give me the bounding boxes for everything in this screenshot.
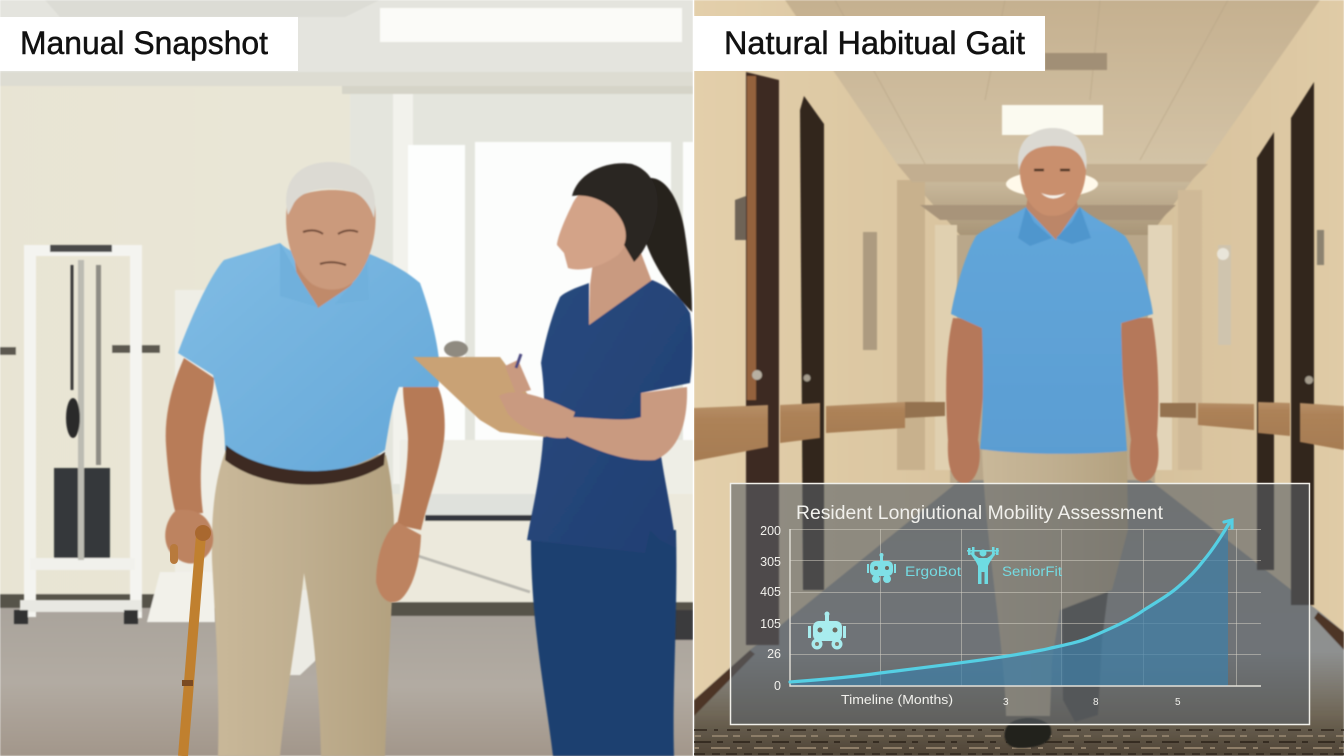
x axis labels: 8 bbox=[1093, 697, 1099, 708]
walking man's trousers bbox=[982, 450, 1128, 716]
walking man's shoe bbox=[1005, 718, 1051, 748]
y axis labels: 26 bbox=[767, 647, 781, 661]
walking man's eyes bbox=[1034, 169, 1070, 171]
ceiling lights bbox=[1002, 53, 1107, 197]
heading: Natural Habitual Gait bbox=[694, 16, 1045, 71]
clipboard clip bbox=[444, 341, 468, 357]
x axis labels bbox=[841, 693, 1181, 708]
chart title: Resident Longiutional Mobility Assessment bbox=[796, 503, 1164, 524]
walking man's arms bbox=[946, 318, 1159, 484]
label: SeniorFit: SeniorFit bbox=[1002, 564, 1062, 579]
nurse's head bbox=[556, 194, 627, 270]
nurse's hair bbox=[572, 163, 658, 262]
man's arms bbox=[165, 358, 445, 602]
chart grid lines bbox=[790, 529, 1261, 686]
walking man's smile bbox=[1041, 193, 1066, 198]
panel: natural habitual gait scene bbox=[694, 0, 1344, 756]
pen bbox=[516, 354, 521, 368]
man's head bbox=[286, 190, 376, 290]
x axis labels: 5 bbox=[1175, 697, 1181, 708]
y axis labels: 200 bbox=[760, 524, 781, 538]
nurse's arm bbox=[565, 387, 687, 460]
man's collar bbox=[280, 246, 354, 308]
man's trousers bbox=[212, 450, 394, 756]
x axis labels: Timeline (Months) bbox=[841, 693, 953, 707]
walking man's head bbox=[1020, 144, 1086, 216]
y axis labels: 305 bbox=[760, 555, 781, 569]
man's belt bbox=[225, 445, 385, 485]
growth curve with arrow bbox=[790, 520, 1232, 682]
man's hair bbox=[286, 162, 375, 218]
y axis labels: 105 bbox=[760, 617, 781, 631]
person: smiling man walking bbox=[946, 128, 1159, 748]
panel: mobility assessment chart bbox=[730, 484, 1310, 724]
walking man's neck bbox=[1026, 196, 1078, 240]
y axis labels: 0 bbox=[774, 679, 781, 693]
man's neck bbox=[294, 262, 353, 308]
carpet texture bbox=[694, 730, 1344, 754]
icon: weightlifter SeniorFit bbox=[967, 547, 999, 584]
panel: manual snapshot scene bbox=[0, 0, 693, 756]
person: elderly man with cane bbox=[165, 162, 445, 756]
walking man's hair bbox=[1018, 128, 1087, 170]
man's shirt bbox=[178, 243, 440, 473]
doors bbox=[735, 72, 1324, 645]
icon: large robot bbox=[808, 612, 846, 650]
nurse's trousers bbox=[531, 530, 676, 756]
clinic room background bbox=[0, 0, 693, 756]
walking man's collar bbox=[1018, 207, 1091, 246]
y axis labels bbox=[760, 524, 781, 693]
dark shadowed leg and shoe bbox=[1062, 592, 1108, 721]
nurse's scrub top bbox=[527, 280, 692, 553]
icon: small robot ErgoBot bbox=[867, 553, 896, 583]
man's face details bbox=[303, 230, 358, 265]
heading: Manual Snapshot bbox=[0, 17, 298, 71]
walking man's shirt bbox=[951, 207, 1153, 454]
chart axes bbox=[790, 529, 1261, 686]
nurse's ponytail bbox=[642, 178, 692, 312]
heading: Manual Snapshot: Manual Snapshot bbox=[20, 25, 268, 61]
x axis labels: 3 bbox=[1003, 697, 1009, 708]
handrails bbox=[694, 402, 1344, 461]
icon: walking cane bbox=[174, 525, 211, 756]
hallway background bbox=[694, 0, 1344, 756]
heading: Natural Habitual Gait: Natural Habitual Gait bbox=[724, 25, 1025, 61]
exercise machine bbox=[14, 245, 142, 624]
nurse's neck bbox=[589, 240, 652, 325]
area under curve bbox=[790, 525, 1228, 686]
nurse's hands bbox=[499, 360, 575, 438]
y axis labels: 405 bbox=[760, 585, 781, 599]
label: ErgoBot: ErgoBot bbox=[905, 564, 961, 579]
chart background bbox=[730, 484, 1310, 724]
clipboard bbox=[413, 357, 546, 437]
person: nurse with clipboard bbox=[413, 163, 692, 756]
